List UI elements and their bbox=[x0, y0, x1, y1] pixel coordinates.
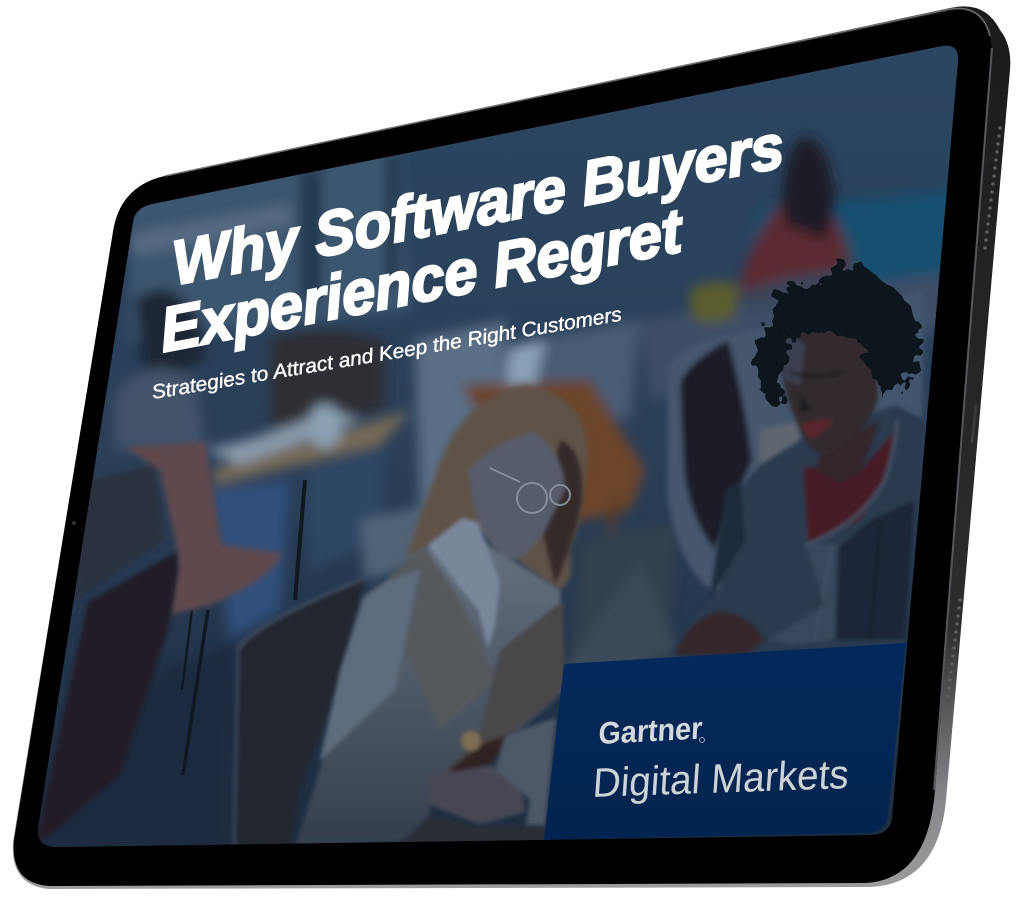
logo: Digital Markets: Digital Markets bbox=[591, 751, 850, 806]
woman right: curly hair bbox=[755, 264, 922, 405]
title: Experience Regret bbox=[157, 196, 687, 366]
speaker grille bottom bbox=[946, 598, 962, 698]
woman centre: wrist and hand bbox=[428, 730, 525, 825]
camera dot bbox=[72, 521, 76, 525]
desk bbox=[404, 815, 546, 842]
subtitle: Strategies to Attract and Keep the Right Customers bbox=[150, 304, 623, 404]
side button bbox=[972, 406, 976, 442]
table leg bbox=[295, 480, 305, 600]
woman centre: glasses bbox=[490, 468, 570, 513]
woman right: hands bbox=[675, 612, 765, 655]
right grey chair bbox=[668, 290, 925, 600]
woman centre: face bbox=[468, 432, 565, 561]
blurred cafe background bbox=[40, 137, 960, 850]
woman centre: collar bbox=[428, 518, 500, 648]
front maroon chair bbox=[36, 552, 178, 847]
title: Why Software Buyers bbox=[169, 112, 787, 299]
logo: Gartner: Gartner bbox=[598, 711, 703, 751]
title bbox=[162, 134, 782, 354]
logo panel bbox=[544, 643, 906, 840]
woman right: face and neck bbox=[778, 322, 880, 483]
centre dark chair bbox=[232, 578, 365, 850]
woman centre: hair bbox=[405, 385, 588, 590]
speaker grille top bbox=[983, 126, 1002, 250]
woman centre: dark hair inner bbox=[540, 440, 582, 585]
paper on desk bbox=[495, 718, 556, 830]
logo: registered mark bbox=[700, 738, 704, 742]
woman centre: sweater bbox=[295, 540, 565, 848]
left chairs bbox=[75, 442, 283, 615]
woman right: jacket bbox=[710, 404, 924, 648]
